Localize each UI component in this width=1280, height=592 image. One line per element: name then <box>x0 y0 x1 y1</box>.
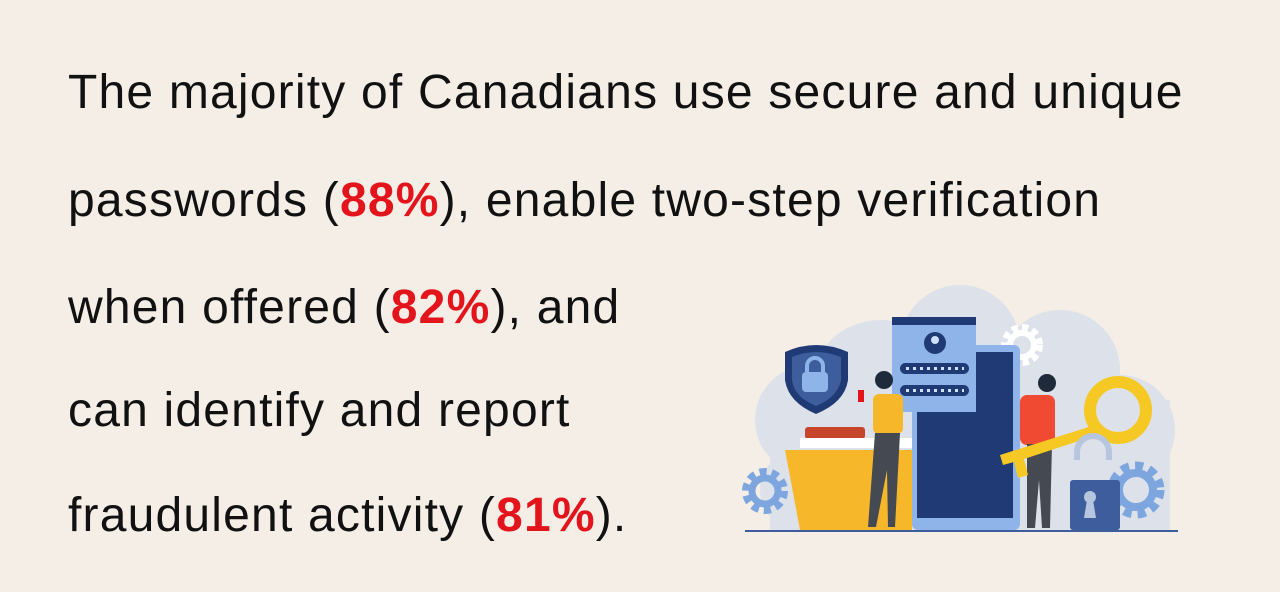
gear: top white <box>1005 328 1039 362</box>
man with key <box>1020 374 1056 528</box>
padlock <box>1070 436 1120 530</box>
login card <box>892 317 976 412</box>
folder <box>785 427 912 530</box>
phone <box>912 345 1020 530</box>
shield with lock <box>785 345 848 414</box>
ground line <box>745 530 1178 532</box>
key <box>1000 382 1146 478</box>
woman <box>858 371 903 527</box>
line 3: when offered (82%), and <box>68 281 620 334</box>
line 1: The majority of Canadians use secure and unique <box>68 66 1184 119</box>
line 2: passwords (88%), enable two-step verification <box>68 174 1101 227</box>
gear: left <box>746 472 784 510</box>
line 5: fraudulent activity (81%). <box>68 489 627 542</box>
line 4: can identify and report <box>68 384 571 437</box>
gear: right <box>1112 466 1160 514</box>
background cloud <box>755 285 1175 530</box>
